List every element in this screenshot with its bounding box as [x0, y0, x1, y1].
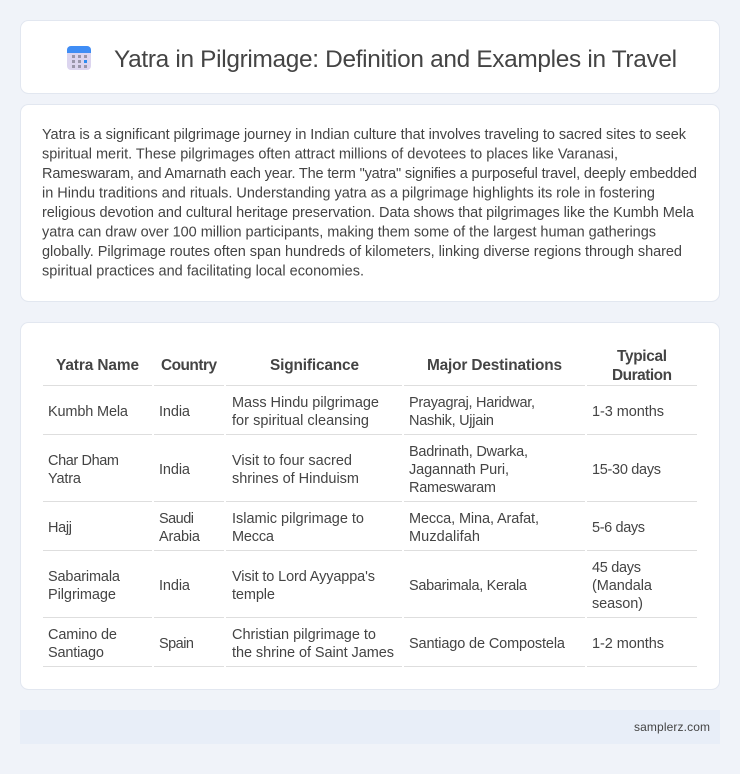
footer credit: samplerz.com: [634, 720, 710, 734]
table header: Country: [161, 357, 217, 374]
row: Hajj: Mecca, Mina, Arafat,: [409, 511, 539, 527]
row: Camino de Santiago: Santiago de Compostela: [409, 636, 566, 652]
row: Sabarimala Pilgrimage: season): [592, 596, 643, 612]
row: Sabarimala Pilgrimage: Visit to Lord Ayyappa's: [232, 569, 375, 585]
text block: introduction paragraph: Yatra is a significant pilgrimage journey in Indian culture that involves traveling to sacred sites to seek: [42, 127, 687, 143]
table header: Typical: [617, 348, 667, 365]
icon: calendar: [67, 46, 91, 70]
row: Sabarimala Pilgrimage: India: [159, 578, 191, 594]
row: Sabarimala Pilgrimage: Sabarimala: [48, 569, 121, 585]
table header: Significance: [270, 357, 359, 374]
text block: introduction paragraph: spiritual practices and facilitating local economies.: [42, 264, 364, 280]
row: Kumbh Mela: 1-3 months: [592, 404, 664, 420]
row: Hajj: 5-6 days: [592, 520, 645, 536]
row: Hajj: Hajj: [48, 520, 72, 536]
row: Char Dham Yatra: [48, 444, 661, 496]
text block: introduction paragraph: in Hindu traditions and rituals. Understanding yatra as a pilgrimage highlights its role in fostering: [42, 186, 655, 202]
row: Sabarimala Pilgrimage: Sabarimala, Kerala: [409, 578, 528, 594]
row: Kumbh Mela: for spiritual cleansing: [232, 413, 369, 429]
row: Char Dham Yatra: Jagannath Puri,: [409, 462, 509, 478]
table header: [56, 348, 672, 384]
row: Kumbh Mela: Kumbh Mela: [48, 404, 129, 420]
row: Kumbh Mela: Mass Hindu pilgrimage: [232, 395, 379, 411]
row: Hajj: Arabia: [159, 529, 201, 545]
row: Hajj: [48, 511, 645, 545]
text block: introduction paragraph: yatra can draw over 100 million participants, making them some of the largest human gatherings: [42, 224, 656, 240]
row: Sabarimala Pilgrimage: (Mandala: [592, 578, 653, 594]
row: Camino de Santiago: Christian pilgrimage to: [232, 627, 376, 643]
row: Kumbh Mela: Prayagraj, Haridwar,: [409, 395, 535, 411]
row: Char Dham Yatra: Rameswaram: [409, 480, 496, 496]
text block: introduction paragraph: Rameswaram, and Amarnath each year. The term "yatra" signifies a purposeful travel, deeply embedded: [42, 166, 697, 182]
row: Sabarimala Pilgrimage: 45 days: [592, 560, 641, 576]
panel: title card: [20, 20, 720, 94]
row: Camino de Santiago: the shrine of Saint James: [232, 645, 394, 661]
row: Camino de Santiago: Camino de: [48, 627, 117, 643]
row: Hajj: Mecca: [232, 529, 275, 545]
panel: introduction: [20, 104, 720, 302]
row: Char Dham Yatra: Badrinath, Dwarka,: [409, 444, 528, 460]
row: Char Dham Yatra: Yatra: [48, 471, 82, 487]
table header: Major Destinations: [427, 357, 562, 374]
row: Char Dham Yatra: 15-30 days: [592, 462, 661, 478]
text block: introduction paragraph: religious devotion and cultural heritage preservation. Data shows that pilgrimages like the Kumbh Mela: [42, 205, 695, 221]
row: Hajj: Muzdalifah: [409, 529, 480, 545]
row: Char Dham Yatra: shrines of Hinduism: [232, 471, 359, 487]
panel: yatra table: [20, 322, 720, 690]
row: Sabarimala Pilgrimage: temple: [232, 587, 275, 603]
table header: Duration: [612, 367, 672, 384]
row: Hajj: Islamic pilgrimage to: [232, 511, 364, 527]
row: Kumbh Mela: [48, 395, 664, 429]
footer bar: [20, 710, 720, 744]
row: Camino de Santiago: Santiago: [48, 645, 104, 661]
row: Kumbh Mela: Nashik, Ujjain: [409, 413, 494, 429]
row: Char Dham Yatra: India: [159, 462, 191, 478]
row: Camino de Santiago: Spain: [159, 636, 194, 652]
text block: introduction paragraph: spiritual merit. These pilgrimages often attract millions of devotees to places like Varanasi,: [42, 146, 618, 162]
row: Sabarimala Pilgrimage: Pilgrimage: [48, 587, 116, 603]
row: Kumbh Mela: India: [159, 404, 191, 420]
title: Yatra in Pilgrimage: Definition and Examples in Travel: [114, 46, 677, 73]
row: Char Dham Yatra: Visit to four sacred: [232, 453, 352, 469]
row: Hajj: Saudi: [159, 511, 194, 527]
text block: introduction paragraph: globally. Pilgrimage routes often span hundreds of kilometers, linking diverse regions through shared: [42, 244, 682, 260]
row: Camino de Santiago: [48, 627, 664, 661]
row: Char Dham Yatra: Char Dham: [48, 453, 119, 469]
row: Camino de Santiago: 1-2 months: [592, 636, 664, 652]
table header: Yatra Name: [56, 357, 139, 374]
row: Sabarimala Pilgrimage: [48, 560, 653, 612]
text block: introduction paragraph: [42, 127, 697, 280]
